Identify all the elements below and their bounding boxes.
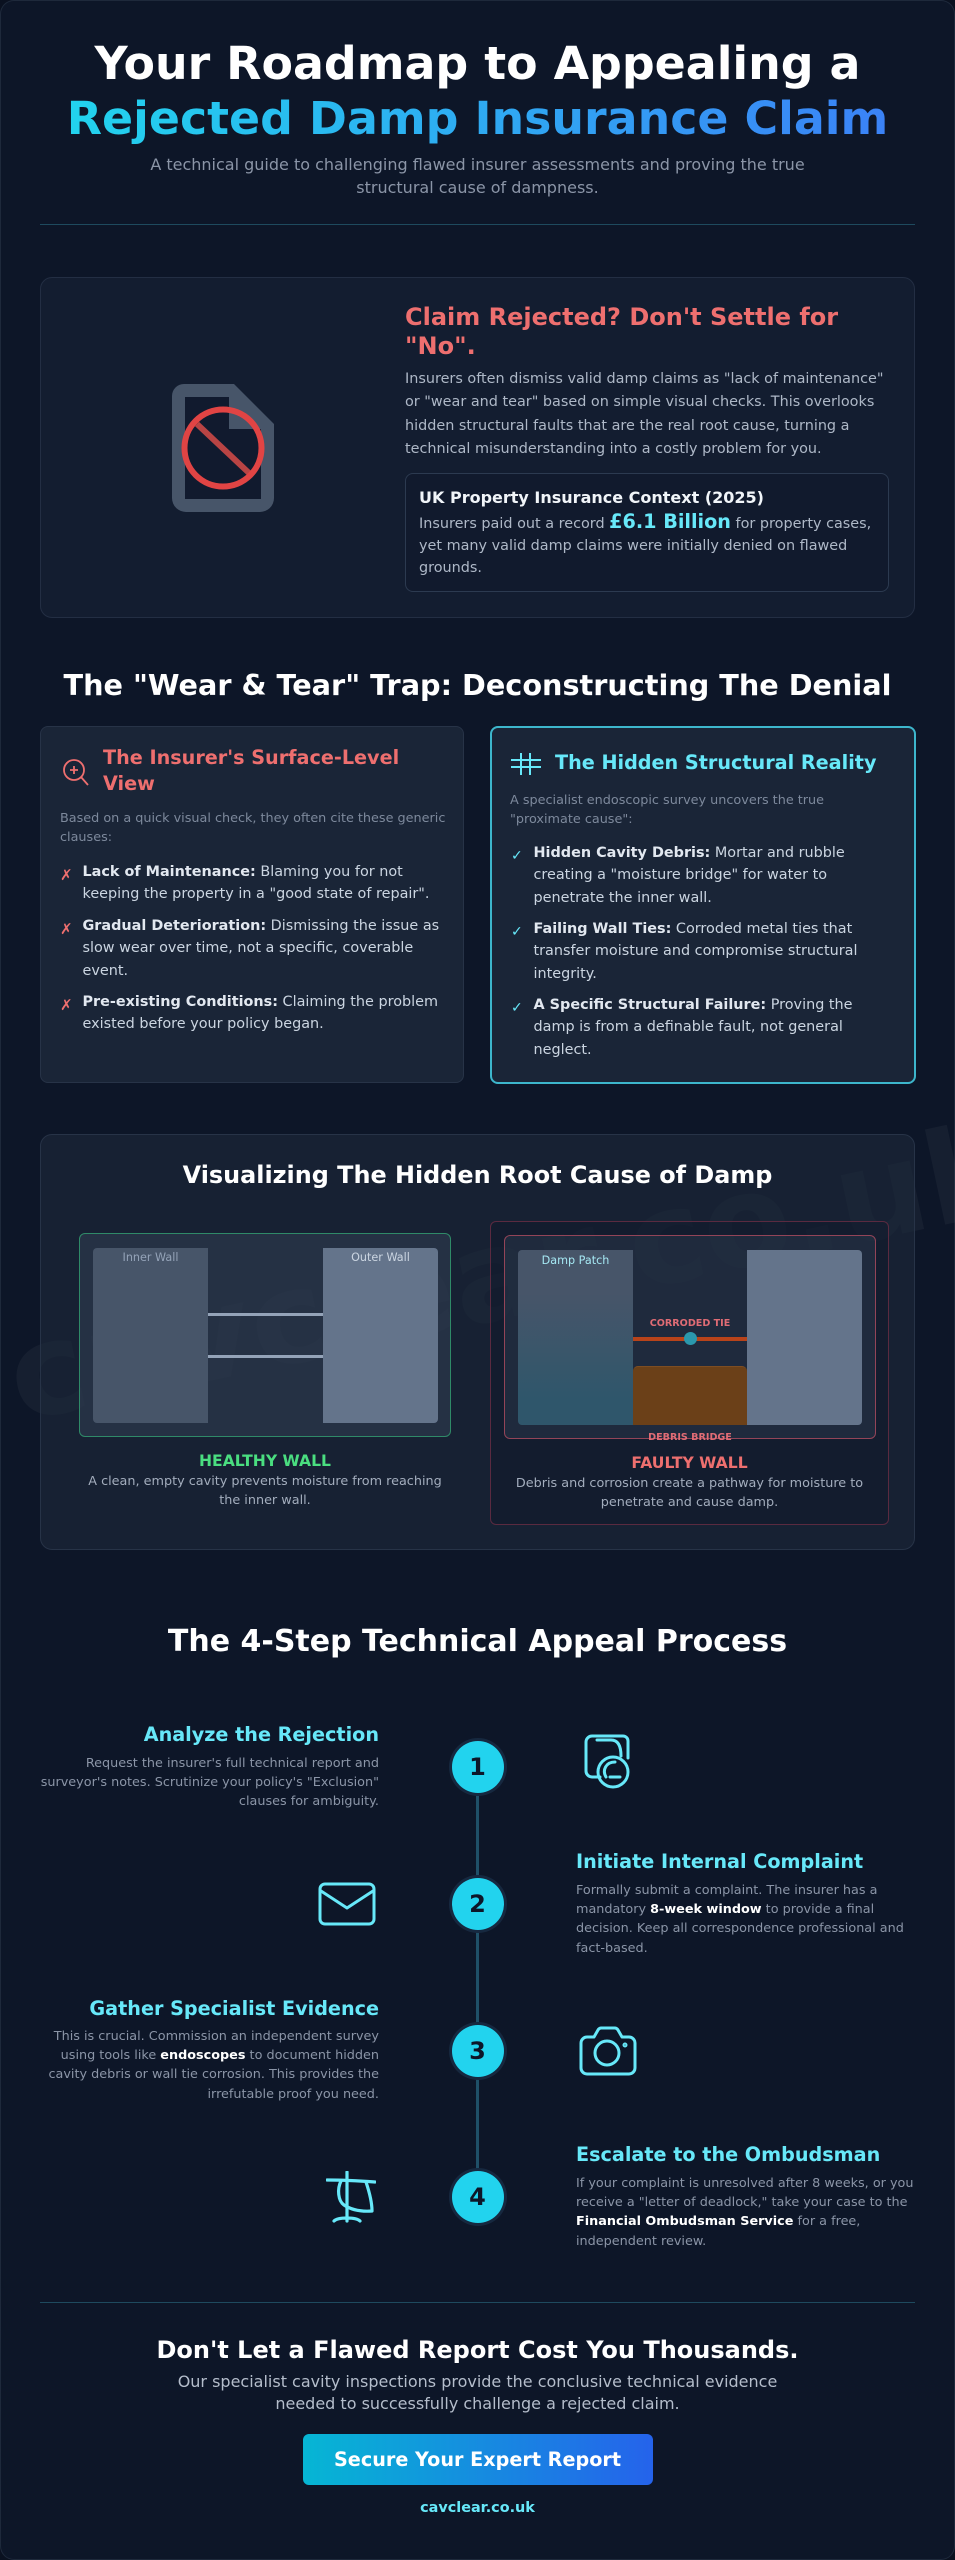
list item: pre-existing conditions (60, 994, 438, 1032)
debris bridge (633, 1366, 747, 1425)
subtitle: structural cause of dampness. (356, 178, 599, 197)
step 4 text: Financial Ombudsman Service for a free, (576, 2214, 860, 2229)
callout text (419, 510, 871, 576)
list item: hidden cavity debris: creating a "moisture bridge" for water to (534, 867, 827, 883)
heading: visualizing: Visualizing The Hidden Root Cause of Damp (183, 1161, 772, 1189)
list item: hidden cavity debris: ✓ (511, 848, 523, 864)
faulty description: penetrate and cause damp. (601, 1495, 778, 1510)
list item: lack of maintenance: keeping the property in a "good state of repair". (82, 886, 430, 902)
icon: scales (326, 2171, 376, 2223)
step 1 (41, 1723, 630, 1809)
step 3 title: Gather Specialist Evidence (89, 1997, 379, 2020)
button: secure report (302, 2434, 652, 2485)
label faulty: FAULTY WALL (631, 1454, 748, 1472)
list item: hidden cavity debris (511, 845, 845, 906)
step 3 number: 3 (469, 2037, 486, 2065)
wall tie upper (208, 1313, 323, 1316)
timeline line (476, 1790, 479, 2175)
button: secure report: Secure Your Expert Report (334, 2448, 621, 2471)
step 2 text: mandatory 8-week window to provide a final (576, 1902, 874, 1917)
step 4 title: Escalate to the Ombudsman (576, 2143, 880, 2166)
title: Your Roadmap to Appealing a (94, 36, 860, 90)
step 4 number (452, 2171, 504, 2223)
step 1 number: 1 (469, 1753, 486, 1781)
icon: rejected document (172, 384, 274, 512)
step 2 title: Initiate Internal Complaint (576, 1850, 863, 1873)
panel: visualizing root cause (40, 1134, 915, 1550)
step 4 (326, 2143, 914, 2249)
text: claim rejected explanation: technical misunderstanding into a costly problem for you. (405, 441, 822, 457)
list item: specific structural failure (511, 997, 853, 1058)
list item: pre-existing conditions: existed before your policy began. (82, 1016, 324, 1032)
icon: document search (584, 1734, 630, 1788)
list item: specific structural failure: damp is from a definable fault, not general (534, 1019, 843, 1035)
step 4 text: receive a "letter of deadlock," take your case to the (576, 2195, 908, 2210)
step 1 number (452, 1741, 504, 1793)
callout text: yet many valid damp claims were initially denied on flawed (419, 538, 847, 554)
step 2 text: fact-based. (576, 1941, 648, 1956)
text: intro clauses: clauses: (60, 830, 112, 845)
call to action (156, 2336, 798, 2516)
step 3 text: irrefutable proof you need. (207, 2087, 379, 2102)
step 2 text: Formally submit a complaint. The insurer has a (576, 1883, 877, 1898)
list item: failing wall ties: ✓ (511, 924, 523, 940)
diagram: faulty wall (504, 1235, 876, 1439)
icon: wall ties grid (511, 753, 541, 775)
label healthy: HEALTHY WALL (199, 1452, 331, 1470)
healthy description: A clean, empty cavity prevents moisture from reaching (88, 1474, 442, 1489)
text: intro clauses (60, 811, 445, 845)
text: intro clauses: Based on a quick visual check, they often cite these generic (60, 811, 445, 826)
list item: gradual deterioration: slow wear over time, not a specific, coverable (82, 940, 413, 956)
list item: pre-existing conditions: Pre-existing Conditions: Claiming the problem (82, 994, 438, 1010)
step 2 text: decision. Keep all correspondence professional and (576, 1921, 904, 1936)
list item: failing wall ties: Failing Wall Ties: Corroded metal ties that (534, 921, 852, 937)
website: cavclear.co.uk (420, 2500, 535, 2516)
step 3 text (48, 2029, 379, 2102)
callout: UK property insurance context (405, 473, 889, 592)
heading: 4-step process: The 4-Step Technical Appeal Process (168, 1624, 787, 1659)
step 4 number: 4 (469, 2183, 486, 2211)
step 1 text: Request the insurer's full technical report and (86, 1756, 379, 1771)
inner wall with damp: Damp Patch (542, 1254, 609, 1267)
list item: specific structural failure: neglect. (534, 1042, 592, 1058)
healthy description: the inner wall. (219, 1493, 311, 1508)
heading: insurer's view: The Insurer's Surface-Level (103, 746, 399, 769)
CTA text: Our specialist cavity inspections provide the conclusive technical evidence (178, 2372, 777, 2391)
list item: gradual deterioration: ✗ (60, 920, 73, 938)
caption: healthy wall (88, 1452, 442, 1508)
faulty description (516, 1476, 863, 1510)
step 3 number (452, 2025, 504, 2077)
text: claim rejected explanation: hidden structural faults that are the real root cause, turning a (405, 418, 849, 434)
heading: insurer's view: View (103, 772, 155, 795)
inner wall with damp (518, 1250, 633, 1425)
wall tie lower (208, 1355, 323, 1358)
callout text: grounds. (419, 560, 482, 576)
heading: insurer's view (103, 746, 399, 795)
corroded tie (633, 1337, 747, 1341)
heading: hidden reality: The Hidden Structural Reality (555, 751, 876, 774)
list item: failing wall ties: integrity. (534, 966, 597, 982)
inner wall (93, 1248, 208, 1423)
list item: hidden cavity debris: penetrate the inner wall. (534, 890, 712, 906)
icon: envelope (318, 1882, 376, 1926)
step 1 text: clauses for ambiguity. (239, 1794, 379, 1809)
list item: failing wall ties: transfer moisture and compromise structural (534, 943, 857, 959)
list item: lack of maintenance: Lack of Maintenance: Blaming you for not (82, 864, 403, 880)
heading: wear and tear trap: The "Wear & Tear" Trap: Deconstructing The Denial (64, 668, 891, 702)
CTA text (178, 2372, 777, 2413)
step 2 number (452, 1878, 504, 1930)
text: intro proximate cause: "proximate cause": (510, 812, 633, 827)
step 4 text: If your complaint is unresolved after 8 weeks, or you (576, 2176, 914, 2191)
step 1 text: surveyor's notes. Scrutinize your policy's "Exclusion" (41, 1775, 379, 1790)
subtitle (150, 155, 805, 197)
step 4 text (576, 2176, 914, 2249)
list item: gradual deterioration: Gradual Deterioration: Dismissing the issue as (82, 918, 439, 934)
step 1 text (41, 1756, 379, 1809)
title: Rejected Damp Insurance Claim (67, 91, 888, 145)
step 3 text: cavity debris or wall tie corrosion. This provides the (48, 2067, 379, 2082)
text: intro proximate cause: A specialist endoscopic survey uncovers the true (510, 793, 824, 808)
list item: lack of maintenance: ✗ (60, 866, 73, 884)
text: intro proximate cause (510, 793, 824, 827)
list item: pre-existing conditions: ✗ (60, 996, 73, 1014)
step 3 (48, 1997, 636, 2102)
caption: faulty wall (516, 1454, 863, 1510)
panel: hidden structural reality (490, 726, 916, 1084)
step 2 number: 2 (469, 1890, 486, 1918)
outer wall (747, 1250, 862, 1425)
icon: magnifier (63, 759, 89, 786)
subtitle: A technical guide to challenging flawed insurer assessments and proving the true (150, 155, 805, 174)
text: claim rejected explanation (405, 371, 883, 457)
healthy description (88, 1474, 442, 1508)
step 2 text (576, 1883, 904, 1956)
callout text: Insurers paid out a record £6.1 Billion for property cases, (419, 510, 871, 533)
corroded tie label: CORRODED TIE (650, 1318, 730, 1329)
CTA heading: Don't Let a Flawed Report Cost You Thousands. (156, 2336, 798, 2364)
text: claim rejected explanation: or "wear and tear" based on simple visual checks. This overlooks (405, 394, 874, 410)
text: claim rejected explanation: Insurers often dismiss valid damp claims as "lack of maintenance" (405, 371, 883, 387)
panel: faulty wall (490, 1221, 889, 1525)
list item: failing wall ties (511, 921, 857, 982)
list item: gradual deterioration: event. (82, 963, 128, 979)
outer wall: Outer Wall (351, 1251, 410, 1264)
outer wall (323, 1248, 438, 1423)
panel: insurer's surface-level view (40, 726, 464, 1083)
list item: hidden cavity debris: Hidden Cavity Debris: Mortar and rubble (534, 845, 845, 861)
step 3 text: This is crucial. Commission an independent survey (54, 2029, 379, 2044)
step 4 text: independent review. (576, 2234, 706, 2249)
debris label: DEBRIS BRIDGE (648, 1432, 732, 1443)
title (67, 36, 888, 145)
step 2 (318, 1850, 904, 1956)
diagram: healthy wall (79, 1233, 451, 1437)
list item: gradual deterioration (60, 918, 439, 979)
step 3 text: using tools like endoscopes to document hidden (61, 2048, 379, 2063)
inner wall: Inner Wall (123, 1251, 178, 1264)
heading: claim rejected (405, 303, 838, 360)
heading: claim rejected: Claim Rejected? Don't Settle for (405, 303, 838, 331)
callout heading: UK Property Insurance Context (2025) (419, 488, 764, 507)
panel: claim rejected (40, 277, 915, 618)
list item: specific structural failure: ✓ (511, 1000, 523, 1016)
heading: claim rejected: "No". (405, 332, 476, 360)
tie corrosion dot (684, 1332, 697, 1345)
step 1 title: Analyze the Rejection (144, 1723, 379, 1746)
list item: lack of maintenance (60, 864, 430, 902)
faulty description: Debris and corrosion create a pathway for moisture to (516, 1476, 863, 1491)
CTA text: needed to successfully challenge a rejected claim. (275, 2394, 680, 2413)
list item: specific structural failure: A Specific Structural Failure: Proving the (534, 997, 853, 1013)
icon: camera (580, 2026, 636, 2076)
